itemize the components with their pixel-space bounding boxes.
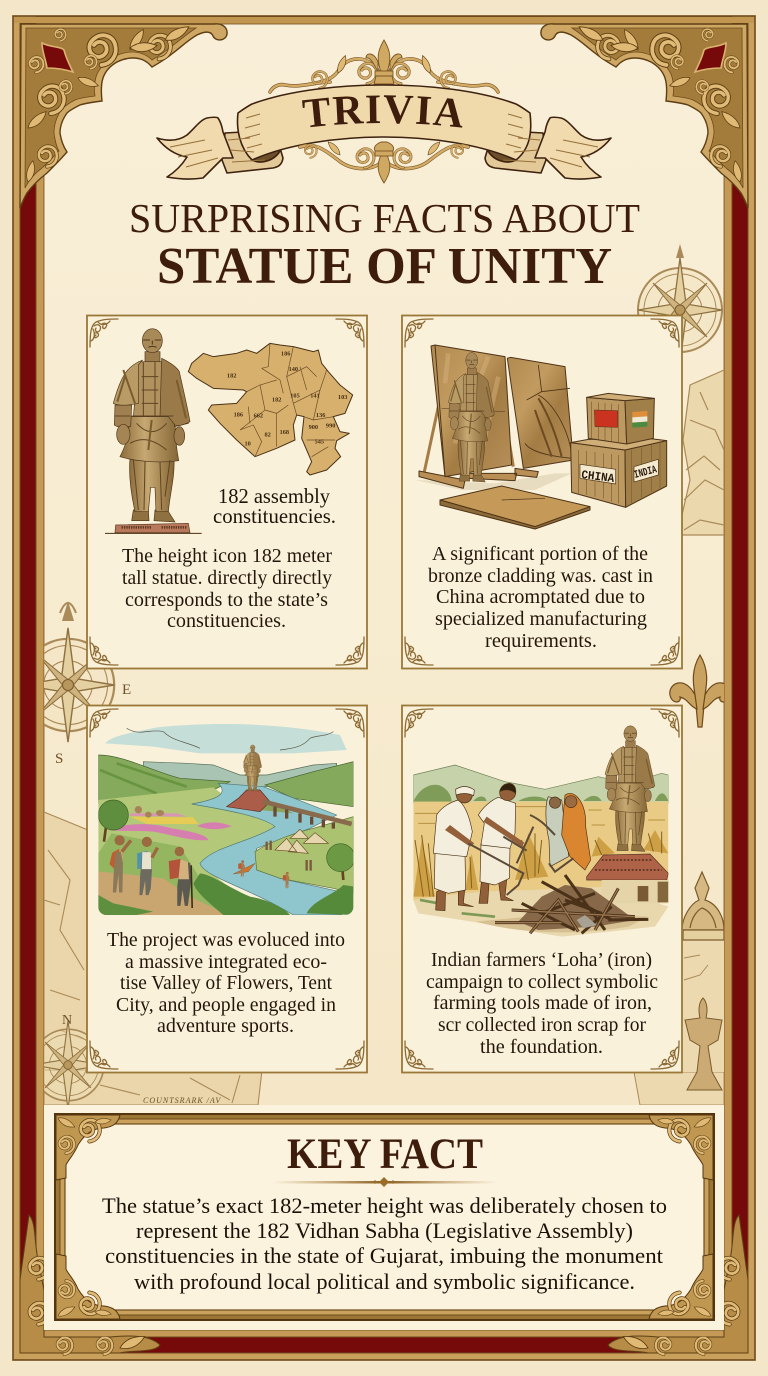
map lower left xyxy=(44,812,262,1105)
compass letter S: S xyxy=(55,751,63,767)
panel 1: height and constituencies xyxy=(87,316,367,668)
Gujarat map: 662 xyxy=(254,412,263,419)
key fact corner xyxy=(649,1114,713,1180)
panel 1 caption xyxy=(213,484,336,528)
key fact text xyxy=(102,1193,667,1294)
panel 4 text: campaign to collect symbolic xyxy=(426,971,658,993)
panel 1 caption: 182 assembly xyxy=(218,484,330,508)
key fact text: represent the 182 Vidhan Sabha (Legislative Assembly) xyxy=(136,1218,633,1243)
panel 4 corners xyxy=(405,709,679,1069)
valley landscape illustration xyxy=(98,724,355,917)
bronze panels and crates illustration xyxy=(415,345,667,529)
farmer figures xyxy=(433,783,591,911)
panel 1 corners xyxy=(90,319,364,665)
Gujarat map: 105 xyxy=(290,393,300,400)
corner ornament top left xyxy=(20,24,227,208)
divider xyxy=(272,1177,497,1187)
Gujarat map: 103 xyxy=(338,394,347,401)
compass letter N: N xyxy=(62,1013,72,1028)
compass lower left xyxy=(44,1020,104,1105)
heading line 1: SURPRISING FACTS ABOUT xyxy=(129,195,640,241)
Gujarat map: 168 xyxy=(280,429,289,436)
panel 1 text: corresponds to the state’s xyxy=(125,589,328,611)
key fact text: The statue’s exact 182-meter height was deliberately chosen to xyxy=(102,1193,667,1218)
Gujarat map: 186 xyxy=(281,350,290,357)
Gujarat map: 182 xyxy=(272,396,281,403)
Gujarat map: 182 xyxy=(227,373,236,380)
compass letter E: E xyxy=(122,682,131,698)
panel 3 text: adventure sports. xyxy=(157,1015,294,1037)
panel 2 text: requirements. xyxy=(485,630,597,652)
panel 1 text: constituencies. xyxy=(167,610,286,632)
Gujarat map: 136 xyxy=(316,412,325,419)
key fact panel xyxy=(44,1105,724,1330)
panel 2 corners xyxy=(405,319,679,665)
Gujarat map xyxy=(188,343,353,475)
dome ornament xyxy=(682,872,724,940)
panel 2 text: China acromptated due to xyxy=(436,586,645,608)
map upper right xyxy=(682,370,724,535)
panel 3 text: City, and people engaged in xyxy=(116,994,336,1016)
trophy ornament xyxy=(685,998,722,1090)
Gujarat map: 141 xyxy=(310,393,320,400)
panel 1 text xyxy=(122,545,333,632)
map lower right xyxy=(634,938,724,1105)
heading line 2: STATUE OF UNITY xyxy=(157,238,612,295)
panel 3 text: a massive integrated eco- xyxy=(125,951,327,973)
key fact corner xyxy=(56,1114,120,1180)
Gujarat map: 140 xyxy=(289,366,298,373)
lower flourish xyxy=(300,139,468,183)
panel 2 text: A significant portion of the xyxy=(432,543,648,565)
Gujarat map: 990 xyxy=(326,422,335,429)
trivia title: TRIVIA xyxy=(302,95,462,128)
panel 4 text: Indian farmers ‘Loha’ (iron) xyxy=(431,949,652,971)
panel 3 text: The project was evoluced into xyxy=(107,929,345,951)
key fact corner xyxy=(56,1254,120,1320)
panel 2 text: specialized manufacturing xyxy=(435,608,647,630)
main ribbon band xyxy=(238,85,531,160)
key fact text: constituencies in the state of Gujarat, imbuing the monument xyxy=(105,1243,664,1268)
Gujarat map: 545 xyxy=(315,438,324,445)
red diamond xyxy=(42,43,73,72)
panel 3 text: tise Valley of Flowers, Tent xyxy=(120,972,332,994)
Gujarat map: 82 xyxy=(265,432,271,439)
map label: COUNTSRARK /AV xyxy=(143,1096,221,1105)
Gujarat map: 900 xyxy=(309,424,318,431)
panel 3 text xyxy=(107,929,345,1037)
Gujarat map: 186 xyxy=(234,412,243,419)
crate label india: INDIA xyxy=(633,464,659,482)
key fact corner xyxy=(649,1254,713,1320)
panel 4 text: farming tools made of iron, xyxy=(433,992,652,1014)
side and bottom gold ornament left xyxy=(20,1215,160,1354)
panel 2 text: bronze cladding was. cast in xyxy=(428,565,653,587)
panel 3: eco-tourism valley xyxy=(87,706,367,1072)
top flourish xyxy=(270,40,498,92)
faded map and compass decorations xyxy=(22,244,730,1109)
Gujarat map: 10 xyxy=(245,440,251,447)
key fact text: with profound local political and symbolic significance. xyxy=(134,1269,635,1294)
key fact title: KEY FACT xyxy=(287,1131,483,1178)
right ribbon tail xyxy=(485,117,611,179)
panel 4 text: scr collected iron scrap for xyxy=(438,1014,646,1036)
panel 2 text xyxy=(428,543,653,652)
ribbon banner xyxy=(157,85,611,179)
corner ornament top right xyxy=(541,24,748,208)
panel 1 text: tall statue. directly directly xyxy=(122,567,333,589)
panel 3 corners xyxy=(90,709,364,1069)
compass upper right xyxy=(638,244,722,362)
compass left xyxy=(44,601,116,742)
fleur ornament right xyxy=(670,655,730,727)
panel 1 caption: constituencies. xyxy=(213,504,336,528)
panel 4 text: the foundation. xyxy=(480,1036,603,1058)
farmers and iron scrap illustration xyxy=(413,726,668,937)
panel 2: bronze cladding xyxy=(402,316,682,668)
panel 4 text xyxy=(426,949,658,1058)
side and bottom gold ornament right xyxy=(608,1215,748,1354)
statue illustration xyxy=(105,329,202,533)
panel 4: loha campaign xyxy=(402,706,682,1072)
left ribbon tail xyxy=(157,117,283,179)
panel 1 text: The height icon 182 meter xyxy=(122,545,332,567)
crate label china: CHINA xyxy=(581,468,616,486)
